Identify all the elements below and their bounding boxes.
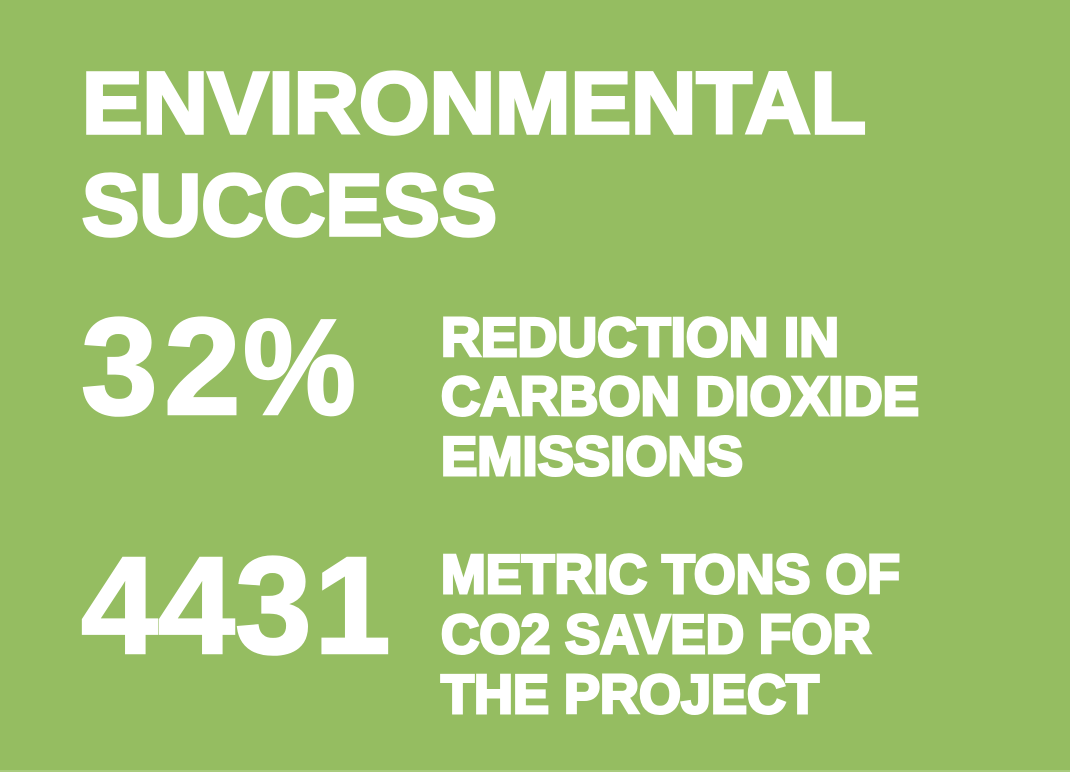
title: SUCCESS: [82, 157, 497, 254]
stat value: 4431: 3: [235, 529, 312, 683]
stat description: metric tons: CO2 SAVED FOR: [441, 603, 871, 665]
stat value: 4431: 4: [81, 529, 158, 683]
stat description: carbon dioxide: [441, 306, 919, 487]
title: ENVIRONMENTAL: [82, 55, 866, 152]
stat description: metric tons: THE PROJECT: [441, 663, 819, 725]
stat value: 32%: 2: [164, 290, 241, 444]
stat description: metric tons: METRIC TONS OF: [441, 543, 900, 605]
stat value: 32%: %: [243, 291, 356, 443]
stat value: 32%: [81, 290, 356, 444]
stat description: carbon dioxide: CARBON DIOXIDE: [441, 365, 919, 427]
stat description: carbon dioxide: EMISSIONS: [441, 425, 743, 487]
stat value: 4431: 1: [314, 529, 391, 683]
stat value: 4431: 4: [158, 529, 235, 683]
stat value: 32%: 3: [81, 290, 158, 444]
stat: 32% reduction: [81, 290, 919, 487]
stat description: carbon dioxide: REDUCTION IN: [441, 306, 839, 368]
stat: 4431 metric tons: [81, 529, 900, 725]
stat description: metric tons: [441, 543, 900, 725]
title: [82, 55, 866, 254]
